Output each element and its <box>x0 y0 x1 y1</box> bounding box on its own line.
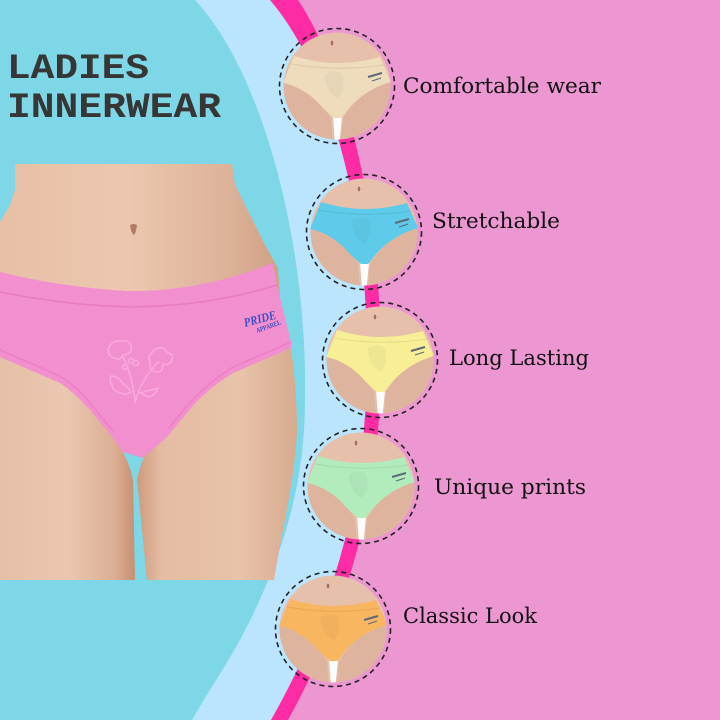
title: INNERWEAR <box>7 88 221 128</box>
garment body <box>0 263 291 458</box>
leg seam <box>0 342 291 431</box>
label: classic look: Classic Look <box>403 604 538 629</box>
label: comfortable wear: Comfortable wear <box>403 74 602 99</box>
left leg <box>0 340 135 580</box>
thumbnail: yellow <box>322 302 438 418</box>
teal curved panel <box>0 0 305 720</box>
brand logo: PRIDE <box>242 308 278 330</box>
label: unique prints: Unique prints <box>434 475 586 500</box>
main product photo: pink garment <box>0 164 297 580</box>
pale blue curved band <box>0 0 367 720</box>
thumbnail: orange <box>276 572 390 686</box>
label: long lasting: Long Lasting <box>449 346 589 371</box>
thumbnail: beige <box>280 28 394 144</box>
title <box>7 49 221 128</box>
waistband seam <box>0 285 277 307</box>
thumbnail: green <box>304 428 418 544</box>
right leg <box>137 340 297 580</box>
brand logo: APPAREL <box>255 318 282 335</box>
label: stretchable: Stretchable <box>432 209 560 234</box>
thumbnail: blue <box>306 174 422 290</box>
hot pink curved stripe <box>270 0 381 720</box>
title: LADIES <box>7 49 149 89</box>
navel <box>130 224 137 235</box>
embossed flower <box>108 341 172 403</box>
torso <box>0 164 280 300</box>
